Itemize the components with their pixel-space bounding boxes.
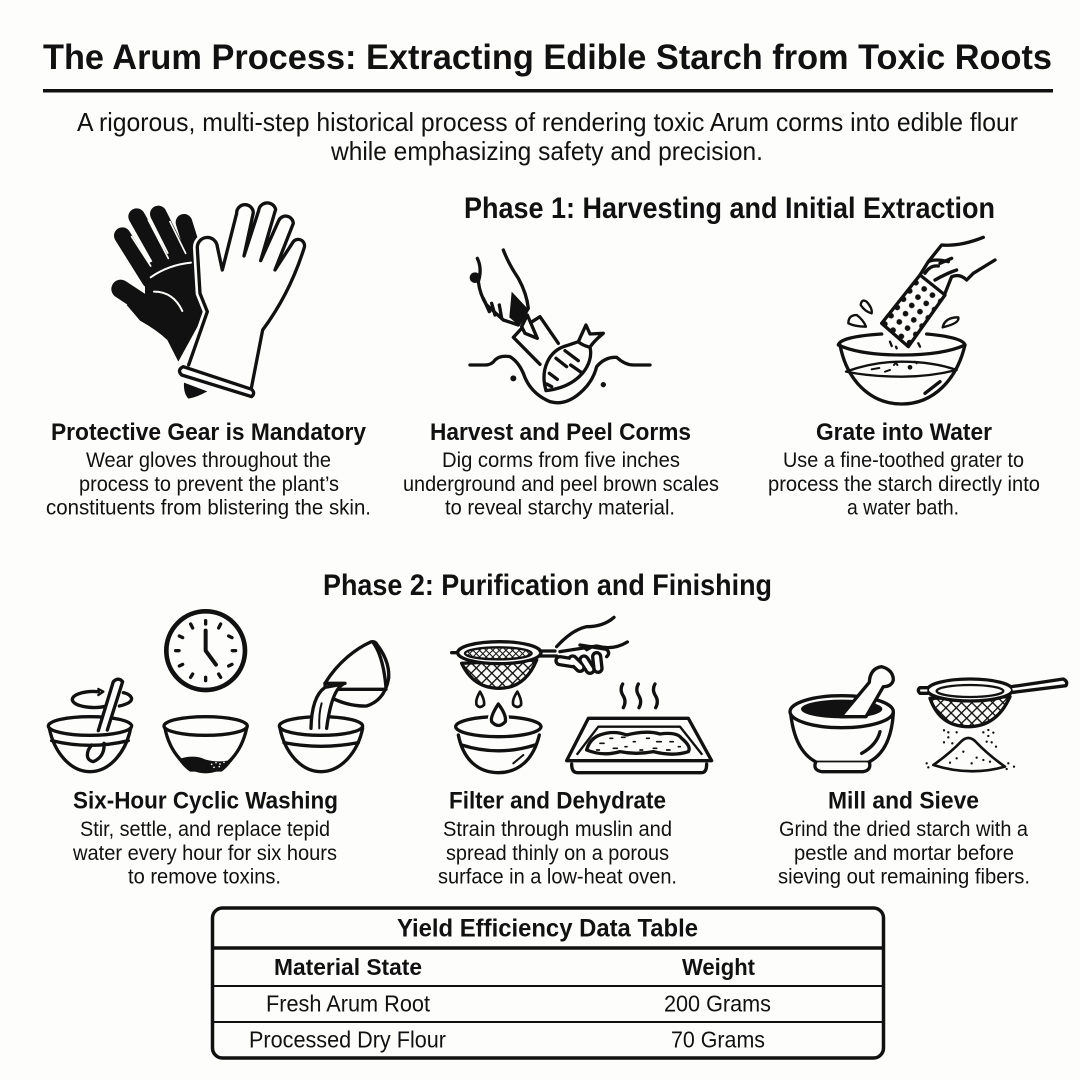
- step: mill and sieve: Grind the dried starch with a: [779, 818, 1028, 841]
- step: protective gear: process to prevent the plant’s: [79, 473, 339, 496]
- step: filter and dehydrate: surface in a low-heat oven.: [438, 866, 677, 888]
- step: protective gear: Wear gloves throughout the: [86, 449, 331, 472]
- step: grate into water: a water bath.: [847, 496, 959, 520]
- step: filter and dehydrate: [438, 788, 677, 888]
- step: harvest and peel: Dig corms from five inches: [442, 449, 680, 472]
- title: The Arum Process: Extracting Edible Starch from Toxic Roots: [43, 38, 1052, 77]
- subtitle: while emphasizing safety and precision.: [330, 136, 763, 166]
- step: cyclic washing: [72, 788, 338, 888]
- step: grate into water: Grate into Water: [816, 419, 992, 446]
- step: mill and sieve: [778, 788, 1030, 888]
- step: filter and dehydrate: spread thinly on a porous: [446, 842, 669, 865]
- step: protective gear: Protective Gear is Mandatory: [51, 419, 367, 446]
- table header: Material State: [274, 954, 422, 980]
- step: grate into water: Use a fine-toothed grater to: [783, 449, 1024, 472]
- subtitle: [77, 107, 1018, 166]
- subtitle: A rigorous, multi-step historical process of rendering toxic Arum corms into edible flour: [77, 107, 1018, 137]
- step: protective gear: [46, 419, 371, 520]
- step: cyclic washing: Six-Hour Cyclic Washing: [73, 788, 338, 814]
- table row: fresh root: [266, 990, 771, 1016]
- icon: strainer, drops, bowl and oven tray: [452, 617, 712, 773]
- table row: dry flour: [249, 1026, 765, 1052]
- step: filter and dehydrate: Strain through muslin and: [443, 818, 672, 841]
- step: protective gear: constituents from blistering the skin.: [46, 496, 371, 520]
- icon: harvesting corm with trowel: [470, 250, 650, 403]
- step: cyclic washing: Stir, settle, and replace tepid: [80, 818, 330, 841]
- heading: phase 1: Phase 1: Harvesting and Initial Extraction: [464, 192, 995, 225]
- table header: [274, 954, 755, 980]
- step: harvest and peel: to reveal starchy material.: [445, 496, 675, 520]
- table row: dry flour: Processed Dry Flour: [249, 1026, 446, 1052]
- step: harvest and peel: Harvest and Peel Corms: [430, 419, 691, 446]
- step: harvest and peel: underground and peel brown scales: [403, 473, 719, 496]
- step: filter and dehydrate: Filter and Dehydrate: [449, 788, 666, 814]
- table row: fresh root: Fresh Arum Root: [266, 990, 431, 1016]
- step: mill and sieve: pestle and mortar before: [794, 842, 1014, 865]
- step: grate into water: [768, 419, 1040, 520]
- table title: Yield Efficiency Data Table: [397, 914, 698, 942]
- icon: mortar, pestle and sieve: [790, 667, 1067, 772]
- clock: [166, 611, 245, 690]
- step: mill and sieve: Mill and Sieve: [828, 788, 979, 814]
- data table: [212, 908, 884, 1058]
- table row: fresh root: 200 Grams: [664, 990, 771, 1016]
- icon: protective gloves: [121, 203, 305, 399]
- step: grate into water: process the starch directly into: [768, 473, 1040, 496]
- step: harvest and peel: [403, 419, 719, 520]
- title rule: [43, 89, 1053, 92]
- table header: Weight: [682, 954, 755, 980]
- step: cyclic washing: to remove toxins.: [128, 866, 281, 888]
- icon: washing bowls and clock: [48, 611, 389, 772]
- icon: grater over water bowl: [838, 237, 995, 404]
- table row: dry flour: 70 Grams: [671, 1026, 765, 1052]
- step: mill and sieve: sieving out remaining fibers.: [778, 866, 1030, 888]
- step: cyclic washing: water every hour for six hours: [72, 842, 337, 865]
- heading: phase 2: Phase 2: Purification and Finishing: [323, 569, 772, 602]
